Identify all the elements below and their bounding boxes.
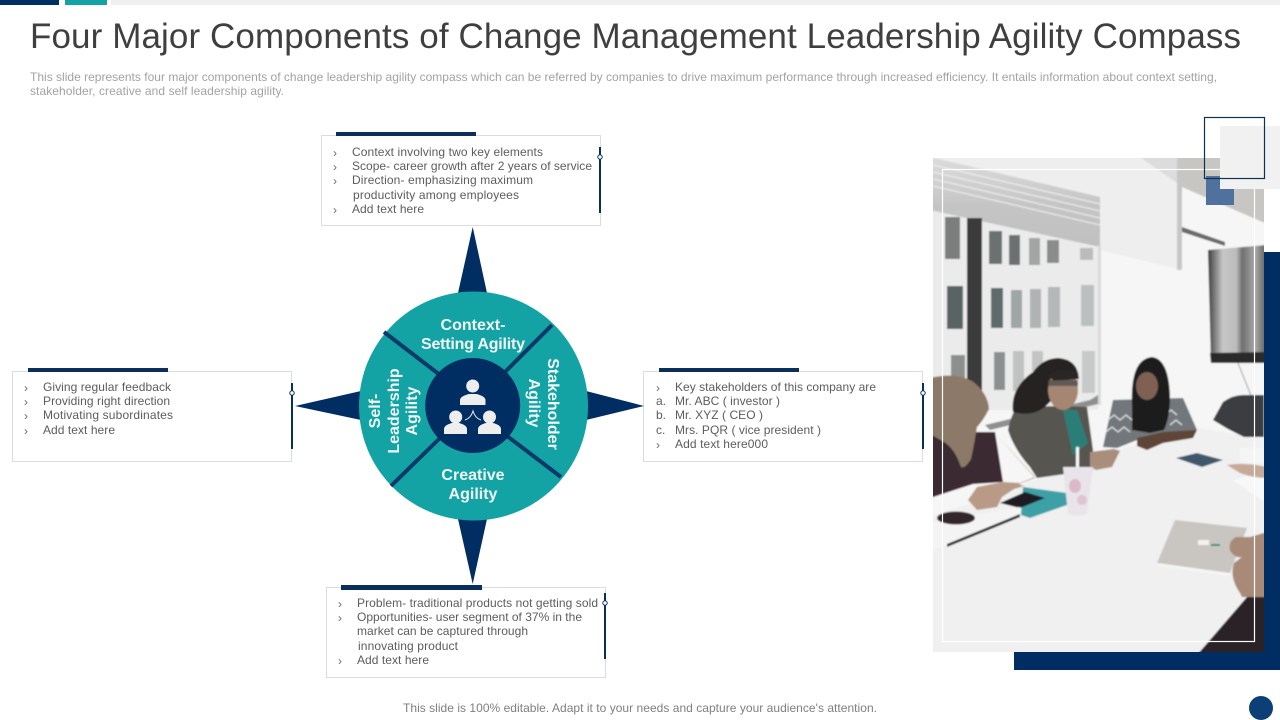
panel: context-setting text box: Scope- career growth after 2 years of service	[352, 159, 592, 173]
wheel dividers	[384, 325, 561, 486]
top accent bars	[0, 0, 1280, 5]
panel: stakeholder text box: Mr. ABC ( investor )	[675, 394, 780, 408]
label: self-leadership agility: Leadership	[386, 368, 403, 454]
panel: context-setting text box: Direction- emphasizing maximum	[352, 173, 533, 187]
panel: creative text box: market can be captured through	[357, 624, 528, 638]
notebooks and teal folder	[1176, 453, 1223, 467]
panel: context-setting text box: Context involving two key elements	[352, 145, 543, 159]
panel: context-setting text box: productivity among employees	[353, 188, 519, 202]
panel: creative text box: ›	[338, 611, 342, 625]
compass wheel	[359, 292, 588, 520]
panel: context-setting text box	[322, 132, 602, 226]
panel: self-leadership text box: ›	[24, 395, 28, 409]
panel: context-setting text box: Add text here	[352, 202, 424, 216]
panel: creative text box: innovating product	[358, 639, 459, 653]
panel: stakeholder text box: Mr. XYZ ( CEO )	[675, 408, 763, 422]
phone	[1213, 395, 1264, 437]
woman middle	[1008, 358, 1120, 478]
panel: self-leadership text box: ›	[24, 409, 28, 423]
panel: creative text box: ›	[338, 654, 342, 668]
panel: stakeholder text box	[644, 368, 925, 462]
label: self-leadership agility	[367, 368, 421, 454]
panel: stakeholder text box: Key stakeholders of this company are	[675, 380, 876, 394]
label: context-setting agility: Context-	[441, 317, 505, 334]
silver laptop	[1157, 520, 1247, 573]
table	[930, 428, 1267, 655]
panel: self-leadership text box: Add text here	[43, 423, 115, 437]
navy backing block behind photo	[1014, 252, 1280, 670]
panel: creative text box: Problem- traditional products not getting sold	[357, 596, 598, 610]
label: stakeholder agility: Stakeholder	[544, 358, 561, 450]
woman left	[930, 376, 1035, 510]
panel: creative text box: ›	[338, 597, 342, 611]
panel: stakeholder text box: b.	[656, 408, 666, 422]
title: Four Major Components of Change Management Leadership Agility Compass	[30, 17, 1241, 56]
panel: creative text box: Opportunities- user segment of 37% in the	[357, 610, 582, 624]
panel: self-leadership text box: Motivating subordinates	[43, 408, 173, 422]
hand and arm right	[1230, 532, 1267, 597]
panel: self-leadership text box: ›	[24, 424, 28, 438]
panel: self-leadership text box	[12, 368, 294, 462]
panel: self-leadership text box: Providing right direction	[43, 394, 170, 408]
white inset frame on photo	[942, 170, 1254, 642]
plastic cup	[1063, 447, 1093, 516]
compass diagram	[295, 227, 644, 584]
panel: stakeholder text box: ›	[656, 438, 660, 452]
panel: self-leadership text box: Giving regular feedback	[43, 380, 172, 394]
label: context-setting agility	[421, 317, 525, 353]
wall-mounted screen	[1208, 245, 1267, 363]
panel: stakeholder text box: a.	[656, 394, 666, 408]
label: self-leadership agility: Agility	[404, 386, 421, 435]
panel: self-leadership text box: ›	[24, 381, 28, 395]
photo: women meeting around a conference table	[930, 155, 1267, 655]
panel: context-setting text box: ›	[333, 160, 337, 174]
panel: context-setting text box: ›	[333, 146, 337, 160]
left laptop	[1018, 506, 1021, 509]
compass points	[295, 227, 644, 584]
footer note: This slide is 100% editable. Adapt it to your needs and capture your audience's attention.	[403, 701, 877, 715]
subtitle description: This slide represents four major components of change leadership agility compass which can be referred by companies to drive maximum performance through increased efficiency. It entails information about context setting,	[30, 70, 1217, 84]
label: creative agility: Agility	[449, 486, 498, 503]
subtitle description: stakeholder, creative and self leadership agility.	[30, 84, 284, 98]
subtitle description	[30, 70, 1217, 98]
decorative squares	[1204, 118, 1280, 205]
window	[930, 205, 1098, 410]
label: creative agility	[441, 467, 505, 503]
label: stakeholder agility: Agility	[525, 379, 542, 428]
panel: context-setting text box: ›	[333, 203, 337, 217]
hand and papers right	[1232, 472, 1267, 503]
label: self-leadership agility: Self-	[367, 394, 384, 428]
label: context-setting agility: Setting Agility	[421, 336, 525, 353]
panel: context-setting text box: ›	[333, 174, 337, 188]
label: creative agility: Creative	[441, 467, 505, 484]
panel: creative text box: Add text here	[357, 653, 429, 667]
panel: creative text box	[326, 585, 607, 678]
page number dot	[1249, 696, 1273, 720]
panel: stakeholder text box: c.	[656, 423, 665, 437]
panel: stakeholder text box: Add text here000	[675, 437, 768, 451]
panel: stakeholder text box: Mrs. PQR ( vice president )	[675, 423, 821, 437]
panel: stakeholder text box: ›	[656, 381, 660, 395]
label: stakeholder agility	[525, 358, 561, 450]
woman right	[1103, 357, 1197, 450]
center hub with people icon	[425, 358, 520, 453]
